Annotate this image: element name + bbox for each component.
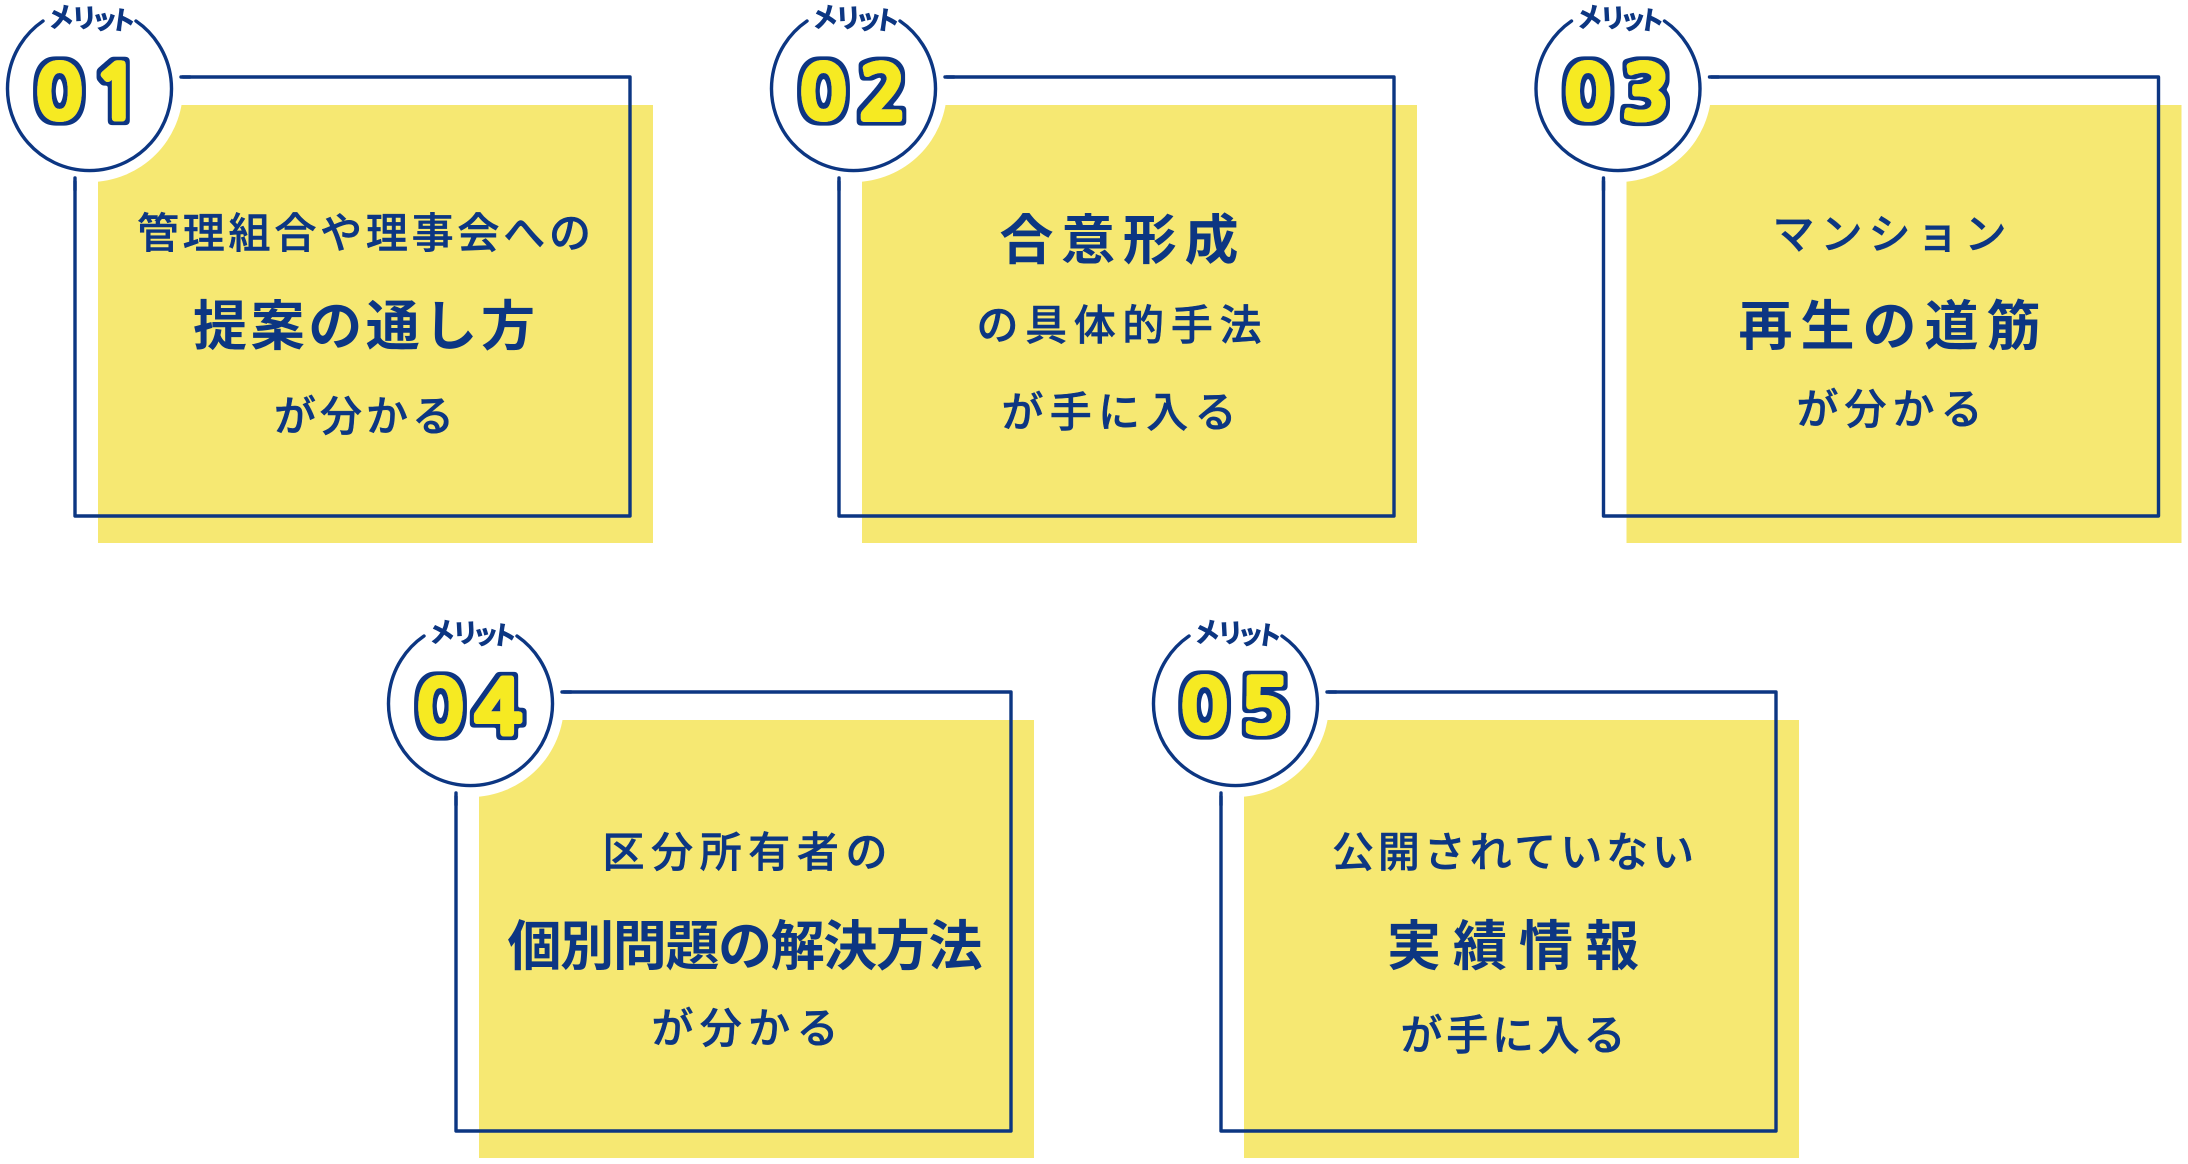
badge number: 01 [36,58,141,131]
body text: 提案の通し方 [193,297,535,357]
badge label: メリット [46,1,138,38]
body text: 再生の道筋 [1738,297,2040,357]
badge circle [7,21,172,171]
panel: merit 05 [1142,610,1799,1158]
body text [1332,829,1694,1059]
badge number: 04 [417,673,522,746]
body text: 個別問題の解決方法 [508,917,982,977]
yellow card [479,720,1034,1158]
badge circle [772,21,936,171]
restored frame ends [1604,77,1718,190]
outline frame [1221,692,1776,1131]
yellow card [1244,720,1799,1158]
panel: merit 04 [377,610,1034,1158]
panel: merit 03 [1524,0,2182,543]
body text [508,829,982,1052]
outline frame [1604,77,2158,516]
restored frame ends [1221,692,1336,805]
body text: マンション [1772,211,2006,258]
body text: が分かる [652,1005,838,1052]
body text [137,210,591,440]
badge cutout [1524,0,1712,182]
badge cutout [377,610,564,797]
badge label: メリット [1192,616,1284,653]
badge number: 03 [1564,58,1670,131]
yellow card [1626,105,2182,543]
yellow card [98,105,653,543]
badge number: 02 [800,58,907,131]
body text [976,211,1262,436]
badge label: メリット [427,616,519,653]
body text: が分かる [274,393,454,440]
badge cutout [760,0,947,182]
badge cutout [1142,610,1329,797]
body text: 実績情報 [1387,917,1639,977]
yellow card [862,105,1417,543]
badge circle [1154,636,1318,786]
body text: 管理組合や理事会への [137,210,591,257]
restored frame ends [456,692,571,805]
body text: 公開されていない [1332,829,1694,876]
badge number: 05 [1181,672,1289,745]
restored frame ends [75,77,190,190]
badge circle [1536,21,1700,171]
outline frame [839,77,1394,516]
panel: merit 02 [760,0,1417,543]
outline frame [456,692,1011,1131]
body text: 区分所有者の [602,829,888,876]
badge cutout [0,0,183,182]
body text: が手に入る [1400,1012,1626,1059]
badge circle [388,636,552,786]
panel: merit 01 [0,0,653,543]
body text: の具体的手法 [976,302,1262,349]
body text: が分かる [1796,386,1982,433]
body text: が手に入る [1002,389,1236,436]
body text [1738,211,2040,433]
body text: 合意形成 [1000,211,1238,271]
outline frame [75,77,630,516]
badge label: メリット [1574,1,1667,38]
restored frame ends [839,77,954,190]
badge label: メリット [810,1,902,38]
